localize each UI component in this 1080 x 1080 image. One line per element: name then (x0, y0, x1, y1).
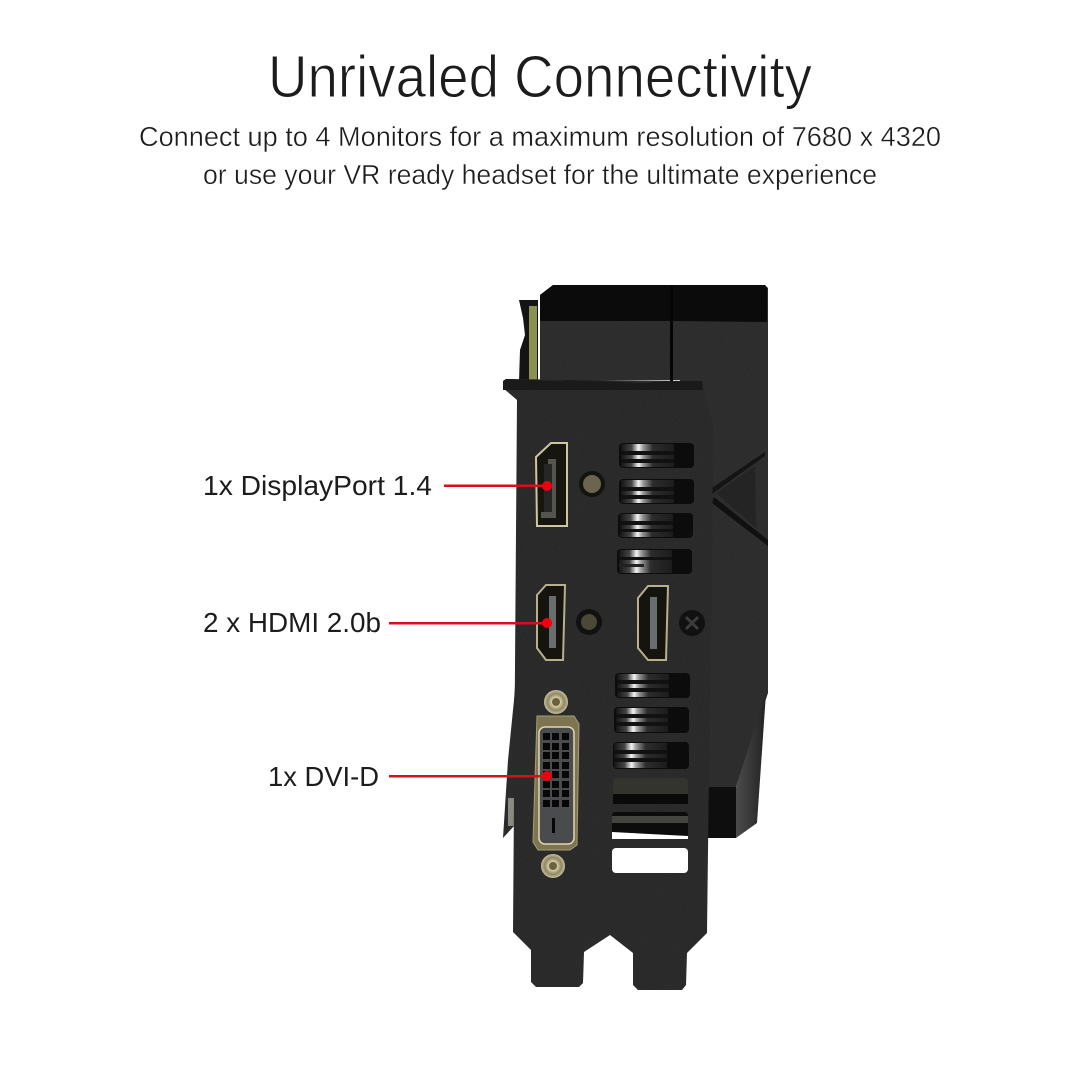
DVI top thumb screw (544, 690, 568, 714)
HDMI screw 2 (679, 610, 705, 636)
PCB edge behind bracket (503, 300, 538, 838)
title: Unrivaled Connectivity (268, 44, 812, 110)
DVI flat blade slot (552, 818, 555, 833)
HDMI screw 1 (576, 609, 602, 635)
DVI shell (533, 716, 579, 850)
HDMI connector 1 (537, 585, 565, 660)
DVI-D connector (533, 690, 579, 878)
metal bracket (503, 379, 713, 990)
pointer: DVI-D (389, 771, 552, 781)
pointer: HDMI (389, 618, 552, 628)
DisplayPort screw (579, 471, 605, 497)
DVI bottom thumb screw (541, 854, 565, 878)
label: DVI-D: 1x DVI-D (268, 761, 379, 792)
pointer: DisplayPort (444, 481, 552, 491)
bracket top flange (503, 379, 703, 390)
DisplayPort connector (536, 443, 567, 526)
label: HDMI: 2 x HDMI 2.0b (203, 607, 381, 638)
subtitle (139, 121, 941, 190)
subtitle: or use your VR ready headset for the ultimate experience (203, 159, 877, 190)
graphics card illustration (503, 285, 768, 990)
label: DisplayPort: 1x DisplayPort 1.4 (203, 470, 432, 501)
HDMI connector 2 (638, 586, 668, 660)
cooler shroud (540, 285, 768, 838)
DVI pin grid (543, 733, 569, 807)
subtitle: Connect up to 4 Monitors for a maximum resolution of 7680 x 4320 (139, 121, 941, 152)
ventilation slots (612, 443, 694, 873)
DVI inner face (539, 727, 574, 844)
